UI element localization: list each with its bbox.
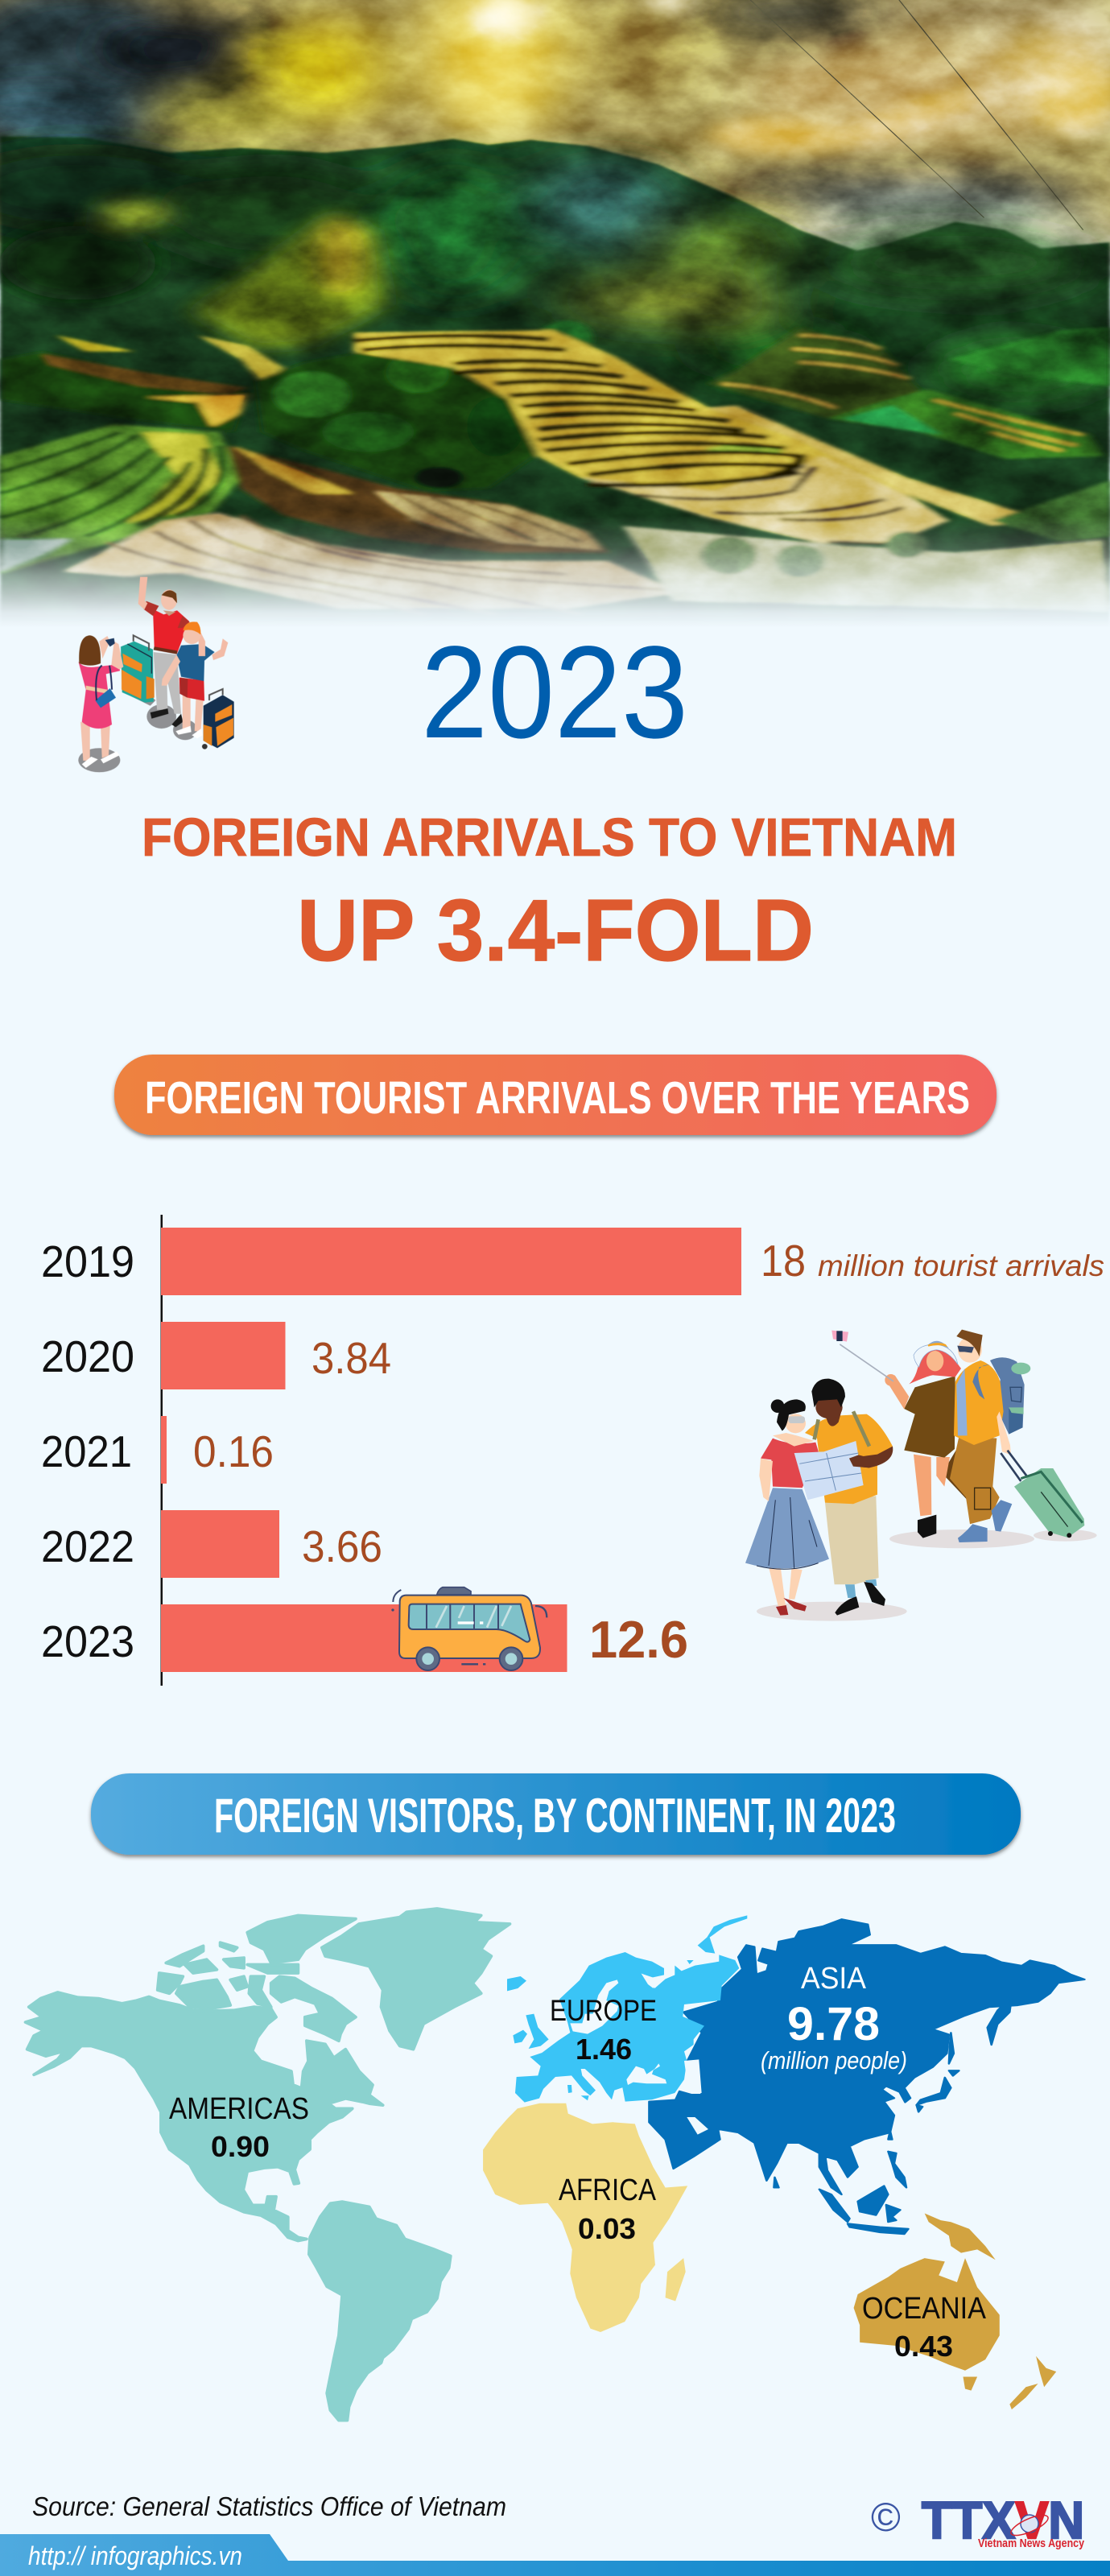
- source note: Source: General Statistics Office of Vietnam: [32, 2491, 506, 2521]
- map region: Africa: [483, 2103, 687, 2332]
- heading pill: arrivals over the years: [114, 1055, 997, 1135]
- white fade of photo into page: [0, 515, 1110, 652]
- bar 2023: 2023: [41, 1616, 134, 1666]
- golden central terrace: [354, 330, 949, 542]
- foreground terraces and forest: [0, 320, 1110, 614]
- bar 2021: 0.16: [193, 1426, 274, 1476]
- bar 2021: [41, 1416, 274, 1484]
- map region: Europe: [507, 1915, 747, 2135]
- label: Europe: [550, 1994, 657, 2066]
- label: Oceania: 0.43: [894, 2330, 953, 2363]
- label: Europe: EUROPE: [550, 1994, 657, 2027]
- footer bar with URL: [0, 2534, 1110, 2576]
- right far terraces: [708, 328, 920, 419]
- label: Asia: ASIA: [801, 1962, 867, 1996]
- label: Americas: 0.90: [211, 2130, 270, 2163]
- label: Oceania: OCEANIA: [862, 2292, 987, 2326]
- bar 2019: 2019: [41, 1236, 134, 1286]
- lower pale field: [623, 526, 1110, 612]
- bar 2022: 2022: [41, 1521, 134, 1571]
- label: Americas: AMERICAS: [169, 2092, 309, 2126]
- label: Americas: [169, 2092, 309, 2163]
- label: Asia: [761, 1962, 907, 2074]
- cream terraces lower left: [64, 513, 679, 609]
- title: year: 2023: [421, 618, 688, 766]
- logo: TTXVN Vietnam News Agency: ©: [871, 2495, 901, 2540]
- label: Africa: [559, 2174, 657, 2245]
- bar 2020: [41, 1322, 391, 1389]
- bar 2021: 2021: [41, 1426, 132, 1476]
- brown terraced slope: [226, 445, 609, 553]
- bar 2019: [41, 1228, 1104, 1295]
- forest: [255, 346, 534, 491]
- label: Europe: 1.46: [576, 2033, 632, 2066]
- label: Africa: AFRICA: [559, 2174, 657, 2207]
- icon: family of tourists with suitcases: [78, 577, 234, 772]
- logo: TTXVN Vietnam News Agency: Vietnam News Agency: [978, 2537, 1085, 2550]
- icon: yellow bus: [391, 1587, 547, 1670]
- bar 2019: million tourist arrivals: [818, 1249, 1104, 1282]
- bar 2022: [41, 1510, 382, 1578]
- bar 2023: [41, 1604, 688, 1672]
- map region: Oceania: [854, 2214, 1056, 2409]
- bar 2020: 3.84: [312, 1333, 391, 1383]
- map region: Asia: [649, 1919, 1084, 2234]
- selfie couple: [831, 1330, 1084, 1542]
- map region: Americas: [26, 1909, 510, 2421]
- map couple: [745, 1379, 893, 1616]
- icon: two tourist couples with map and selfie stick: [745, 1330, 1097, 1621]
- label: Asia: (million people): [761, 2046, 907, 2074]
- cloud and foliage texture overlay: [0, 0, 1110, 644]
- label: Oceania: [862, 2292, 987, 2363]
- bar 2023: 12.6: [589, 1610, 688, 1669]
- bar 2020: 2020: [41, 1331, 134, 1381]
- footer bar with URL: http:// infographics.vn: [28, 2541, 242, 2570]
- label: Asia: 9.78: [787, 1998, 880, 2050]
- title: emphasis line: UP 3.4-FOLD: [297, 881, 814, 980]
- logo: TTXVN Vietnam News Agency: TTXVN: [922, 2491, 1084, 2549]
- heading pill: visitors by continent: [91, 1773, 1021, 1855]
- bar 2022: 3.66: [302, 1521, 382, 1571]
- world map: visitors by continent: [26, 1909, 1084, 2421]
- title: main line: FOREIGN ARRIVALS TO VIETNAM: [142, 807, 957, 868]
- hero photo: rice terraces under a golden sky: [0, 0, 1110, 652]
- bar chart: foreign tourist arrivals by year: [41, 1215, 1104, 1686]
- label: Africa: 0.03: [578, 2212, 636, 2245]
- left green furrows: [0, 424, 241, 574]
- bar 2019: 18: [761, 1236, 806, 1286]
